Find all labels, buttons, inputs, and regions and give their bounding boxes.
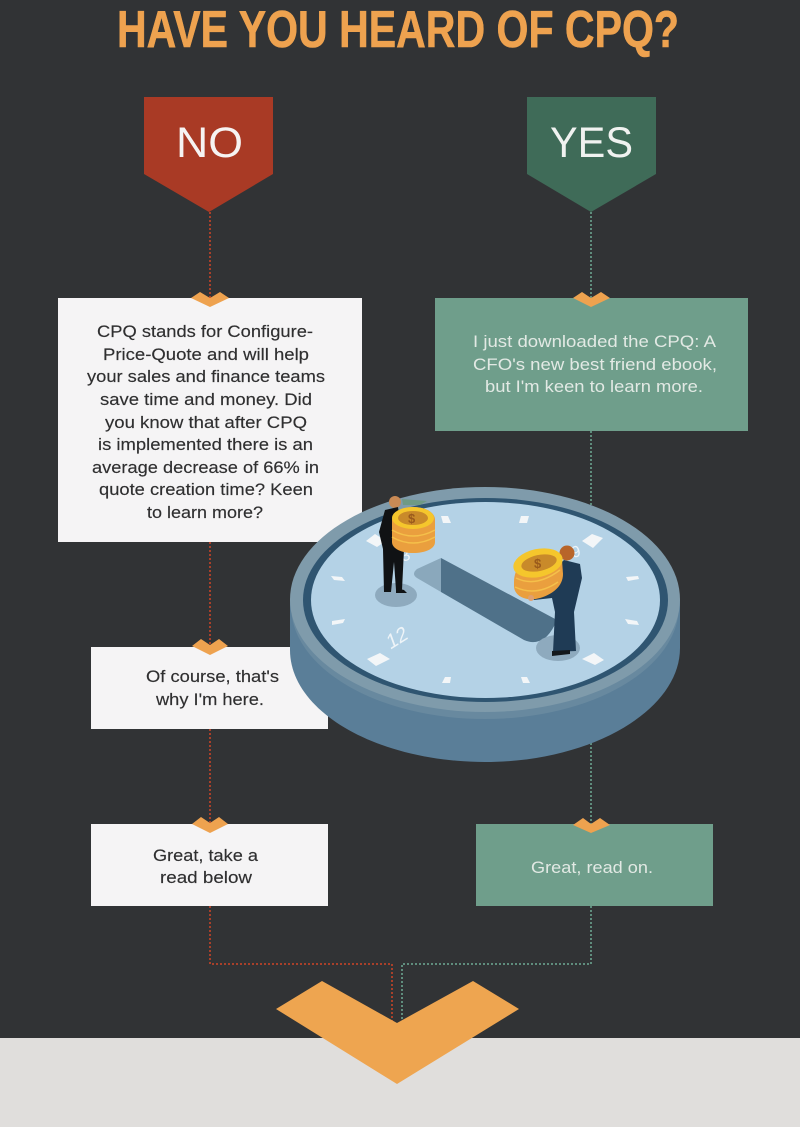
panel: take a read below: Great, take a	[153, 847, 259, 865]
businessman with coins, right: $	[534, 556, 542, 571]
panel: what CPQ stands for: CPQ stands for Configure-	[97, 323, 313, 341]
panel: of course	[91, 647, 328, 729]
connector: green YES path	[402, 212, 591, 1022]
clock hand slot	[414, 558, 557, 642]
panel: what CPQ stands for: Price-Quote and will help	[103, 346, 309, 364]
businessman with coins, left	[375, 496, 435, 607]
connector: red NO path	[210, 212, 392, 1024]
hour markers	[331, 516, 639, 683]
panel: of course: why I'm here.	[155, 691, 264, 709]
businessman with coins, right	[511, 544, 582, 661]
panel: what CPQ stands for: to learn more?	[147, 504, 263, 522]
badge: NO: NO	[176, 119, 243, 167]
panel: what CPQ stands for: save time and money. Did	[100, 391, 312, 409]
panel: what CPQ stands for: average decrease of 66% in	[92, 459, 319, 477]
businessman with coins, left: $	[408, 511, 416, 526]
panel: ebook reader: CFO's new best friend ebook,	[473, 356, 717, 374]
panel: what CPQ stands for: you know that after CPQ	[105, 414, 307, 432]
clock face	[311, 502, 660, 698]
panel: read on	[476, 824, 713, 906]
clock numeral 12: 12	[384, 622, 411, 655]
clock dark ring	[303, 498, 668, 702]
panel: read on: Great, read on.	[531, 859, 653, 877]
icon: clock with businessmen	[290, 487, 680, 762]
badge: YES	[527, 97, 656, 212]
panel: ebook reader: I just downloaded the CPQ: A	[473, 333, 716, 351]
clock numeral 9: 9	[570, 543, 583, 562]
panel: ebook reader: but I'm keen to learn more.	[485, 378, 703, 396]
clock body	[290, 600, 680, 762]
panel: what CPQ stands for: is implemented there is an	[98, 436, 313, 454]
clock numeral 3: 3	[399, 547, 413, 566]
small orange chevrons	[191, 292, 610, 833]
badge: YES: YES	[550, 119, 633, 167]
panel: take a read below	[91, 824, 328, 906]
panel: ebook reader	[435, 298, 748, 431]
panel: what CPQ stands for	[58, 298, 362, 542]
clock numeral 6: 6	[569, 639, 581, 657]
light footer band	[0, 1038, 800, 1127]
panel: of course: Of course, that's	[146, 668, 279, 686]
badge: NO	[144, 97, 273, 212]
panel: what CPQ stands for: your sales and finance teams	[87, 368, 325, 386]
panel: what CPQ stands for: quote creation time? Keen	[99, 481, 313, 499]
clock rim	[290, 487, 680, 712]
clock rim shadow band	[291, 493, 679, 719]
panel: take a read below: read below	[160, 869, 252, 887]
arrow: big orange chevron	[276, 981, 519, 1084]
